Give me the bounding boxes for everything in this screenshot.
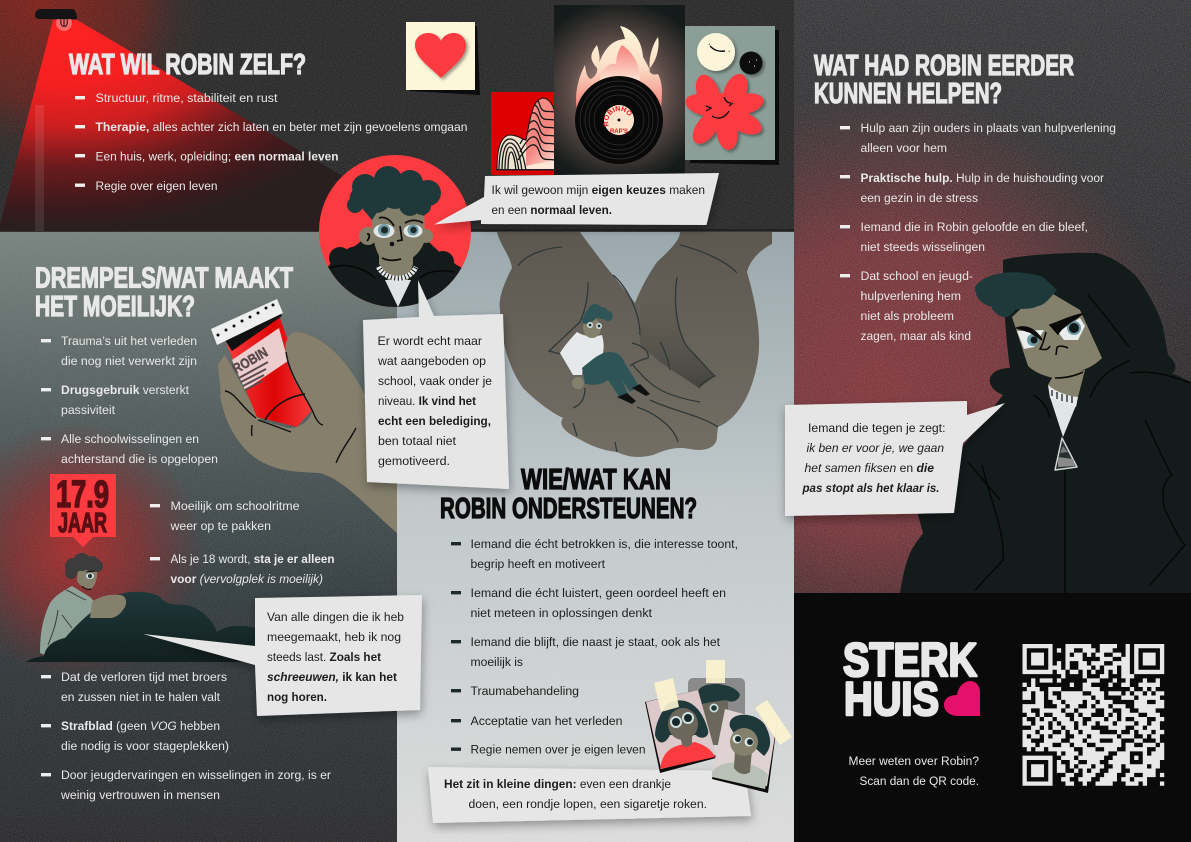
bullet: vertrouwen (41, 768, 331, 802)
bullet list: ondersteuning (451, 537, 738, 756)
callout: schreeuwen: steeds last. Zoals het (267, 650, 381, 664)
bullet: school en jeugdhulp: hulpverlening hem (860, 289, 961, 303)
bullet: school en jeugdhulp: Dat school en jeugd- (860, 269, 973, 283)
zipper pull (1055, 438, 1077, 470)
bullet: verloren tijd: en zussen niet in te halen valt (61, 690, 221, 704)
callout: belediging (363, 280, 509, 489)
callout: belediging: niveau. Ik vind het (378, 394, 476, 408)
callout: schreeuwen: nog horen. (267, 690, 327, 704)
bullet: blijft: moeilijk is (470, 655, 523, 669)
bullet: praktische hulp (840, 171, 1104, 205)
text: scan QR invitation (848, 754, 979, 788)
bullet: ouders: Hulp aan zijn ouders in plaats van hulpverlening (860, 121, 1116, 135)
bullet: verloren tijd: Dat de verloren tijd met broers (61, 670, 227, 684)
callout: schreeuwen: Van alle dingen die ik heb (267, 610, 404, 624)
bullet: praktische hulp: Praktische hulp. Hulp in de huishouding voor (860, 171, 1104, 185)
callout: eigen keuzes: Ik wil gewoon mijn eigen keuzes maken (492, 183, 705, 197)
bullet: regie: Regie nemen over je eigen leven (470, 742, 646, 756)
illustration: pill bottle in hand (211, 299, 397, 533)
heading: wie of wat kan Robin ondersteunen: ROBIN ONDERSTEUNEN? (440, 493, 697, 525)
illustration: pill bottle in hand: ROBIN (230, 344, 270, 377)
bullet: luistert: niet meteen in oplossingen denkt (470, 606, 653, 620)
bullet list: drempels bottom (41, 670, 331, 802)
photo: front left with red shirt (645, 690, 716, 773)
heading: Wat wil Robin zelf: WAT WIL ROBIN ZELF? (69, 49, 306, 81)
callout: schreeuwen: meegemaakt, heb ik nog (267, 630, 401, 644)
illustration: Robin leaning on dark bush (27, 553, 262, 662)
panel: footer background (794, 593, 1191, 842)
QR code (1022, 644, 1164, 786)
panel: center background (397, 231, 794, 842)
illustration: Robin portrait circle (319, 155, 475, 310)
bullet list: wat wil Robin zelf (75, 91, 468, 193)
bullet: luistert (451, 586, 726, 620)
callout: belediging: Er wordt echt maar (378, 334, 482, 348)
illustration: sticky note with heart (406, 22, 480, 95)
bullet: acceptatie: Acceptatie van het verleden (470, 714, 622, 728)
illustration: red wave poster (491, 92, 558, 175)
heading: Wat had Robin eerder kunnen helpen: KUNNEN HELPEN? (814, 78, 1002, 110)
logo: Sterk Huis (843, 633, 980, 725)
bullet: schoolwisselingen (41, 432, 218, 466)
age tag: 17.9 jaar (50, 474, 116, 547)
bullet: ouders (840, 121, 1116, 155)
panel: left background (0, 231, 397, 842)
heading: Wat had Robin eerder kunnen helpen: WAT HAD ROBIN EERDER (814, 50, 1074, 82)
bullet: luistert: Iemand die écht luistert, geen oordeel heeft en (470, 586, 726, 600)
bullet: schoolritme: weer op te pakken (169, 519, 271, 533)
callout: ik ben er voor je: Iemand die tegen je zegt: (808, 421, 946, 435)
heading: wie of wat kan Robin ondersteunen: WIE/WAT KAN (521, 464, 671, 496)
logo: Sterk Huis: STERK (843, 633, 977, 686)
bullet: trauma (41, 334, 197, 368)
bullet: schoolwisselingen: Alle schoolwisselingen en (61, 432, 199, 446)
callout: belediging: gemotiveerd. (378, 454, 450, 468)
callout: kleine dingen (428, 767, 751, 823)
bullet: ouders: alleen voor hem (860, 141, 947, 155)
bullet: schoolwisselingen: achterstand die is opgelopen (61, 452, 218, 466)
callout: ik ben er voor je: pas stopt als het klaar is. (802, 481, 940, 495)
heading: wie of wat kan Robin ondersteunen (440, 464, 697, 525)
bullet: structuur: Structuur, ritme, stabiliteit en rust (96, 91, 278, 105)
bullet: traumabehandeling: Traumabehandeling (470, 684, 579, 698)
heading: Drempels (35, 262, 293, 323)
illustration: small Robin sitting in hands (560, 304, 650, 404)
text: scan QR invitation: Meer weten over Robin? (848, 754, 979, 768)
text: scan QR invitation: Scan dan de QR code. (860, 774, 979, 788)
callout: eigen keuzes (434, 173, 719, 225)
bullet list: drempels top (41, 334, 218, 466)
bullet: school en jeugdhulp (840, 269, 973, 343)
bullet: therapie: Therapie, alles achter zich laten en beter met zijn gevoelens omgaan (96, 120, 468, 134)
illustration: street lamp with red light cone (0, 9, 342, 231)
age tag: 17.9 jaar: 17.9 (56, 474, 109, 516)
photo: front right with grey sweater (712, 709, 777, 793)
bullet: school en jeugdhulp: niet als probleem (860, 309, 954, 323)
bullet: vertrouwen: Door jeugdervaringen en wisselingen in zorg, is er (61, 768, 331, 782)
bullet: geloofde (840, 220, 1088, 254)
illustration: burning vinyl record poster: ROBINHO (604, 106, 632, 126)
bullet: strafblad: Strafblad (geen VOG hebben (61, 719, 220, 733)
bullet list: drempels middle (150, 499, 334, 586)
bullet: 18 worden: Als je 18 wordt, sta je er alleen (170, 552, 334, 566)
heading: Drempels: HET MOEILIJK? (35, 291, 195, 323)
bullet: trauma: die nog niet verwerkt zijn (61, 354, 197, 368)
illustration: large cupped hands holding small Robin (497, 232, 772, 457)
callout: schreeuwen (143, 595, 422, 716)
illustration: three photos with tape (645, 660, 792, 793)
bullet: blijft (451, 635, 721, 669)
bullet: 18 worden (150, 552, 334, 586)
callout: schreeuwen: schreeuwen, ik kan het (267, 670, 397, 684)
bullet: normaal leven: Een huis, werk, opleiding; een normaal leven (96, 150, 338, 164)
bullet: strafblad: die nodig is voor stageplekken) (61, 739, 229, 753)
bullet: geloofde: Iemand die in Robin geloofde en die bleef, (860, 220, 1088, 234)
bullet: geloofde: niet steeds wisselingen (860, 240, 985, 254)
callout: belediging: wat aangeboden op (377, 354, 486, 368)
bullet: blijft: Iemand die blijft, die naast je staat, ook als het (470, 635, 721, 649)
bullet: strafblad (41, 719, 229, 753)
callout: kleine dingen: Het zit in kleine dingen: even een drankje (444, 777, 671, 791)
bullet: betrokken: begrip heeft en motiveert (470, 557, 606, 571)
bullet: school en jeugdhulp: zagen, maar als kind (860, 329, 971, 343)
bullet: trauma: Trauma’s uit het verleden (61, 334, 197, 348)
bullet: verloren tijd (41, 670, 227, 704)
panel: right background (794, 0, 1191, 593)
heading: Wat had Robin eerder kunnen helpen (814, 50, 1074, 110)
bullet: schoolritme: Moeilijk om schoolritme (170, 499, 300, 513)
callout: ik ben er voor je: ik ben er voor je, we gaan (806, 441, 944, 455)
callout: belediging: echt een belediging, (378, 414, 491, 428)
bullet: regie: Regie over eigen leven (96, 179, 218, 193)
callout: ik ben er voor je: het samen fiksen en die (804, 461, 934, 475)
callout: belediging: ben totaal niet (378, 434, 457, 448)
panel: top left background (0, 0, 794, 231)
bullet: vertrouwen: weinig vertrouwen in mensen (60, 788, 220, 802)
photo: back grey (688, 678, 745, 745)
callout: eigen keuzes: en een normaal leven. (492, 203, 612, 217)
bullet: schoolritme (150, 499, 300, 533)
bullet: drugsgebruik (41, 383, 190, 417)
callout: kleine dingen: doen, een rondje lopen, een sigaretje roken. (468, 797, 707, 811)
illustration: burning vinyl record poster: RAP'S (610, 129, 628, 135)
illustration: Robin in black hoodie (900, 253, 1191, 593)
illustration: grey poster with smiling flower (683, 26, 779, 165)
bullet: drugsgebruik: passiviteit (61, 403, 116, 417)
bullet: praktische hulp: een gezin in de stress (860, 191, 978, 205)
callout: ik ben er voor je (785, 401, 1005, 516)
bullet: 18 worden: voor (vervolgplek is moeilijk) (170, 572, 323, 586)
bullet: betrokken (451, 537, 738, 571)
tape pieces (654, 660, 792, 745)
age tag: 17.9 jaar: JAAR (58, 507, 107, 538)
bullet list: eerder helpen (840, 121, 1116, 343)
bullet: drugsgebruik: Drugsgebruik versterkt (61, 383, 190, 397)
bullet: betrokken: Iemand die écht betrokken is, die interesse toont, (470, 537, 738, 551)
logo: Sterk Huis: HUIS (844, 672, 939, 725)
illustration: burning vinyl record poster (554, 5, 685, 175)
callout: belediging: school, vaak onder je (378, 374, 492, 388)
heading: Drempels: DREMPELS/WAT MAAKT (35, 262, 293, 294)
